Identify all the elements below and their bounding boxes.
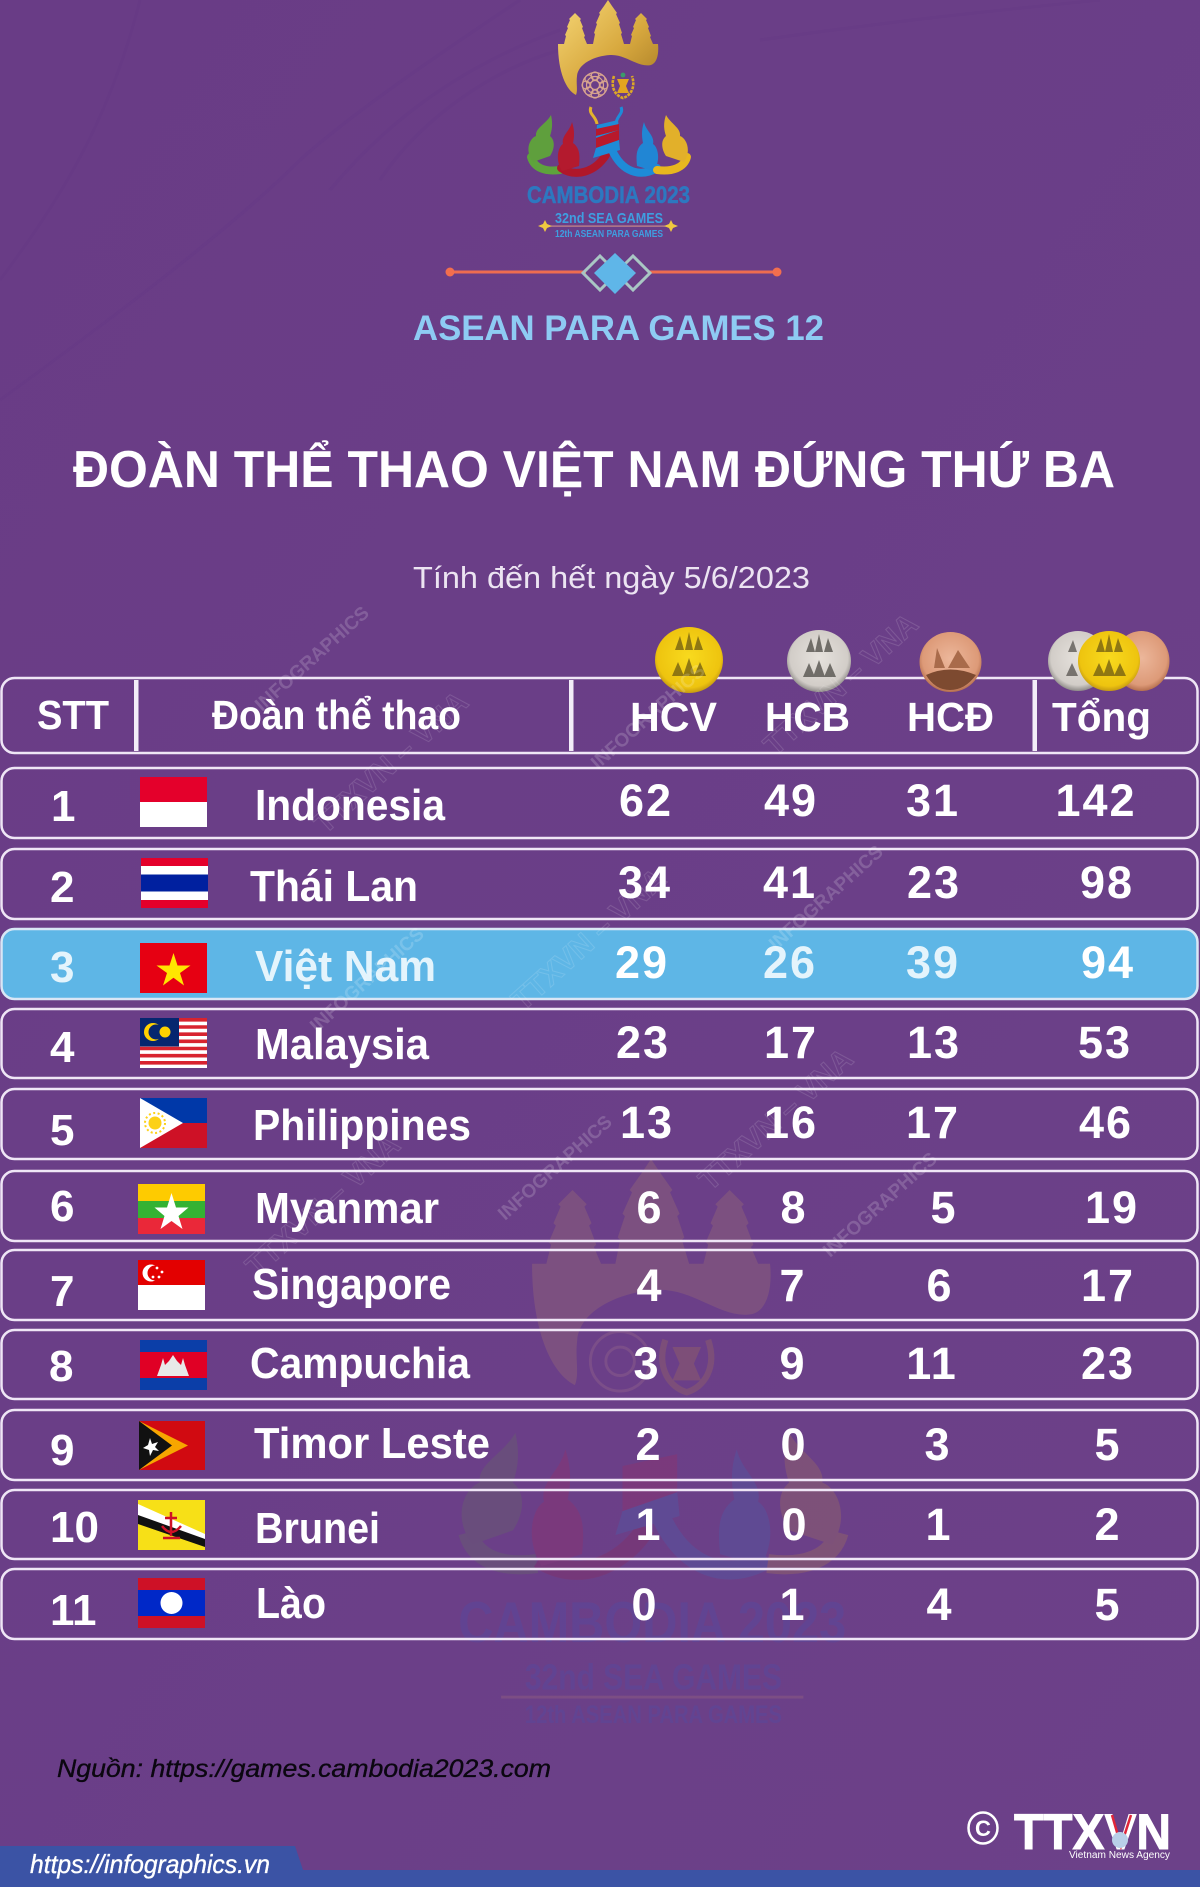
row: Malaysia: 4	[50, 1023, 75, 1072]
diagonal agency watermarks: INFOGRAPHICS	[251, 603, 374, 716]
flag: Timor Leste	[139, 1421, 205, 1470]
subtitle: ASEAN Para Games 12: ASEAN PARA GAMES 12	[413, 309, 824, 348]
row: Lào: Lào	[256, 1579, 326, 1628]
row: Philippines: 46	[1079, 1097, 1133, 1148]
row: Lào: 11	[50, 1586, 97, 1635]
row: Brunei: Brunei	[255, 1504, 380, 1553]
row: Singapore: 7	[779, 1260, 807, 1311]
row: Thái Lan: 41	[763, 857, 817, 908]
row: Campuchia: 3	[633, 1338, 661, 1389]
header logo: Cambodia 2023	[527, 0, 690, 240]
flag: Malaysia	[140, 1018, 207, 1068]
row: Malaysia: Malaysia	[255, 1020, 429, 1069]
diagonal agency watermarks: TTXVN – VNA	[758, 607, 925, 762]
TTXVN logo: Vietnam News Agency	[1069, 1850, 1170, 1861]
faded background logo watermark: 12th ASEAN PARA GAMES	[525, 1701, 782, 1729]
central twist	[590, 107, 622, 158]
ornamental divider	[446, 253, 782, 294]
icon: silver medal	[787, 630, 851, 692]
diagonal agency watermarks: INFOGRAPHICS	[819, 1149, 942, 1262]
footer bar with URL: https://infographics.vn	[30, 1849, 270, 1879]
table header row: HCV	[630, 694, 718, 740]
green naga	[528, 115, 560, 170]
row: Philippines: 13	[620, 1097, 674, 1148]
SEA games flower emblem	[582, 72, 608, 98]
row: Việt Nam (highlighted): 26	[763, 937, 817, 988]
faded background logo watermark: CAMBODIA 2023	[458, 1591, 846, 1655]
row: Thái Lan: 34	[618, 857, 672, 908]
yellow naga	[657, 115, 688, 170]
row: Việt Nam (highlighted): 3	[50, 943, 74, 992]
blue naga	[612, 122, 658, 173]
copyright symbol: C	[975, 1816, 991, 1841]
copyright symbol	[968, 1812, 998, 1844]
row: Timor Leste: 2	[635, 1419, 663, 1470]
logo text: Cambodia 2023: CAMBODIA 2023	[527, 182, 690, 209]
row: Myanmar	[2, 1171, 1198, 1241]
row: Philippines: 17	[906, 1097, 960, 1148]
row: Indonesia	[2, 768, 1198, 838]
row: Philippines: Philippines	[253, 1101, 471, 1150]
row: Indonesia: Indonesia	[255, 781, 445, 830]
table header row: HCĐ	[907, 694, 994, 740]
row: Brunei: 0	[781, 1499, 809, 1550]
row: Myanmar: 5	[930, 1182, 958, 1233]
row: Singapore	[2, 1250, 1198, 1320]
row: Brunei: 10	[50, 1503, 99, 1552]
row: Singapore: 4	[636, 1260, 664, 1311]
icon: combined medals	[1048, 631, 1170, 691]
row: Philippines: 5	[50, 1106, 74, 1155]
table header row: HCB	[765, 694, 850, 740]
logo crown	[558, 0, 658, 95]
row: Indonesia: 31	[906, 775, 960, 826]
row: Thái Lan: 23	[907, 857, 961, 908]
row: Singapore: 17	[1081, 1260, 1135, 1311]
row: Campuchia: 8	[49, 1342, 73, 1391]
table header row: Tổng	[1052, 694, 1151, 740]
row: Indonesia: 142	[1055, 775, 1137, 826]
row: Việt Nam (highlighted): 39	[906, 937, 960, 988]
row: Myanmar: Myanmar	[255, 1184, 439, 1233]
row: Timor Leste	[2, 1410, 1198, 1480]
row: Việt Nam (highlighted): 29	[615, 937, 669, 988]
flag: Indonesia	[140, 777, 207, 827]
diagonal agency watermarks: INFOGRAPHICS	[494, 1112, 617, 1225]
source line: Nguồn: https://games.cambodia2023.com	[57, 1755, 551, 1783]
diagonal agency watermarks: INFOGRAPHICS	[587, 661, 710, 774]
row: Timor Leste: 9	[50, 1426, 74, 1475]
TTXVN logo: TTXVN	[1014, 1804, 1171, 1860]
flag: Laos	[138, 1578, 205, 1628]
main title: ĐOÀN THỂ THAO VIỆT NAM ĐỨNG THỨ BA	[73, 440, 1115, 499]
row: Campuchia: 9	[779, 1338, 807, 1389]
flag: Cambodia	[140, 1340, 207, 1390]
icon: bronze medal	[920, 632, 982, 692]
row: Indonesia: 49	[764, 775, 818, 826]
row: Campuchia: 11	[906, 1338, 958, 1389]
row: Campuchia: 23	[1081, 1338, 1135, 1389]
row: Malaysia: 53	[1078, 1017, 1132, 1068]
icon: gold medal	[655, 627, 723, 693]
row: Thái Lan: 98	[1080, 857, 1134, 908]
diagonal agency watermarks: TTXVN – VNA	[240, 1128, 407, 1283]
logo text: 12th ASEAN Para Games: 12th ASEAN PARA GAMES	[555, 228, 663, 240]
row: Myanmar: 6	[50, 1182, 74, 1231]
row: Timor Leste: 3	[924, 1419, 952, 1470]
row: Singapore: 7	[50, 1267, 74, 1316]
row: Philippines	[2, 1089, 1198, 1159]
row: Malaysia: 13	[907, 1017, 961, 1068]
faded background logo watermark	[458, 1159, 846, 1729]
row: Indonesia: 1	[51, 782, 75, 831]
row: Campuchia	[2, 1330, 1198, 1399]
faded background logo watermark: 32nd SEA GAMES	[525, 1658, 782, 1698]
flag: Vietnam	[140, 943, 207, 993]
row: Campuchia: Campuchia	[250, 1339, 470, 1388]
diagonal agency watermarks: TTXVN – VNA	[693, 1042, 860, 1197]
row: Brunei: 1	[925, 1499, 953, 1550]
row: Việt Nam (highlighted): Việt Nam	[255, 942, 436, 991]
logo line with sparkles	[538, 220, 678, 232]
flag: Thailand	[141, 858, 208, 908]
table header row: STT	[37, 692, 109, 738]
row: Timor Leste: 0	[780, 1419, 808, 1470]
row: Brunei: 1	[635, 1499, 663, 1550]
flag: Brunei	[138, 1500, 205, 1550]
row: Việt Nam (highlighted)	[2, 929, 1198, 999]
row: Thái Lan: Thái Lan	[250, 862, 418, 911]
APSF emblem	[613, 73, 633, 98]
row: Brunei	[2, 1490, 1198, 1559]
diagonal agency watermarks	[240, 603, 942, 1283]
row: Thái Lan	[2, 849, 1198, 919]
diagonal agency watermarks: TTXVN – VNA	[506, 862, 673, 1017]
row: Lào: 0	[631, 1579, 659, 1630]
row: Philippines: 16	[764, 1097, 818, 1148]
row: Indonesia: 62	[619, 775, 673, 826]
flag: Singapore	[138, 1260, 205, 1310]
row: Thái Lan: 2	[50, 863, 74, 912]
date line: Tính đến hết ngày 5/6/2023	[413, 560, 810, 595]
row: Singapore: Singapore	[252, 1260, 451, 1309]
row: Singapore: 6	[926, 1260, 954, 1311]
row: Malaysia: 23	[616, 1017, 670, 1068]
row: Lào: 1	[779, 1579, 807, 1630]
row: Malaysia	[2, 1009, 1198, 1078]
row: Lào: 4	[926, 1579, 954, 1630]
row: Malaysia: 17	[764, 1017, 818, 1068]
row: Timor Leste: 5	[1094, 1419, 1122, 1470]
row: Timor Leste: Timor Leste	[254, 1419, 490, 1468]
row: Lào: 5	[1094, 1579, 1122, 1630]
diagonal agency watermarks: INFOGRAPHICS	[306, 924, 429, 1037]
row: Myanmar: 19	[1085, 1182, 1139, 1233]
diagonal agency watermarks: TTXVN – VNA	[308, 685, 475, 840]
logo text: 32nd SEA Games: 32nd SEA GAMES	[555, 210, 663, 227]
red naga	[558, 122, 606, 173]
row: Việt Nam (highlighted): 94	[1081, 937, 1135, 988]
background swooshes	[0, 0, 1100, 400]
row: Brunei: 2	[1094, 1499, 1122, 1550]
footer bar with URL	[0, 1846, 1200, 1887]
row: Lào	[2, 1569, 1198, 1639]
flag: Myanmar	[138, 1184, 205, 1234]
row: Myanmar: 6	[636, 1182, 664, 1233]
flag: Philippines	[140, 1098, 207, 1148]
table header row	[2, 678, 1198, 753]
table header row: Đoàn thể thao	[212, 692, 461, 738]
row: Myanmar: 8	[780, 1182, 808, 1233]
diagonal agency watermarks: INFOGRAPHICS	[765, 842, 888, 955]
